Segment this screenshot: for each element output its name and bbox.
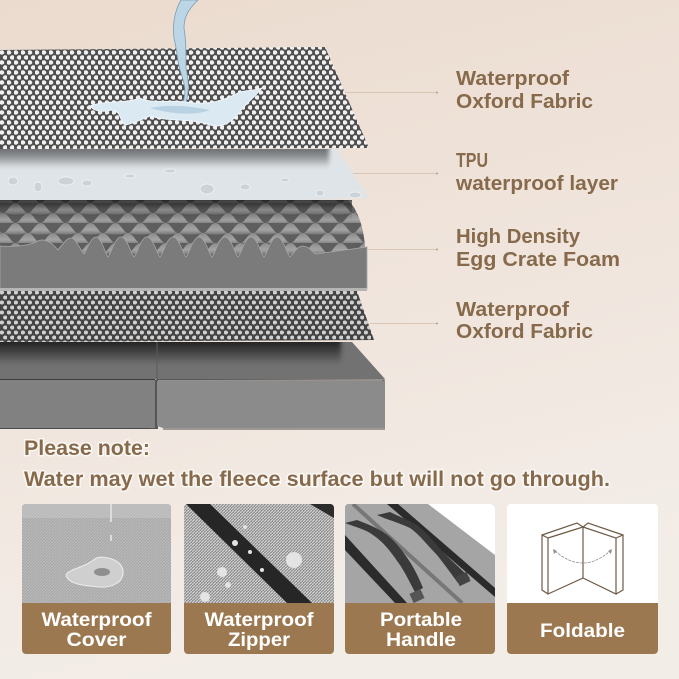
card: waterproof zipper: Zipper (228, 630, 291, 651)
labels: layer names: waterproof layer (455, 172, 618, 195)
icon: folding mattress (542, 523, 623, 594)
note text (24, 436, 610, 491)
card: waterproof zipper: Waterproof (204, 610, 314, 631)
note text: Please note: (24, 436, 150, 460)
labels: layer names: Oxford Fabric (456, 90, 593, 113)
card: portable handle: Handle (386, 630, 456, 651)
leader lines (345, 92, 438, 324)
card: waterproof zipper (184, 504, 334, 654)
card: waterproof cover: Cover (66, 630, 127, 651)
mattress base (0, 336, 385, 429)
labels: layer names: Egg Crate Foam (456, 248, 620, 271)
layer: TPU waterproof layer (0, 146, 369, 200)
labels: layer names: High Density (456, 225, 581, 248)
card: foldable: Foldable (540, 621, 625, 642)
labels: layer names: Waterproof (456, 67, 569, 90)
labels: layer names (455, 67, 620, 343)
labels: layer names: Oxford Fabric (456, 320, 593, 343)
icon: water stream and splash (90, 0, 262, 126)
layer: waterproof oxford fabric top (0, 47, 369, 149)
card: portable handle: Portable (380, 610, 462, 631)
labels: layer names: Waterproof (456, 298, 569, 321)
card: waterproof cover (22, 504, 171, 654)
card: waterproof cover: Waterproof (42, 610, 152, 631)
layer: waterproof oxford fabric bottom (0, 291, 374, 342)
card: foldable (507, 504, 658, 654)
labels: layer names: TPU (456, 149, 488, 172)
card: portable handle (345, 504, 495, 654)
note text: Water may wet the fleece surface but will not go through. (24, 467, 610, 491)
layer: high density egg crate foam (0, 200, 367, 291)
